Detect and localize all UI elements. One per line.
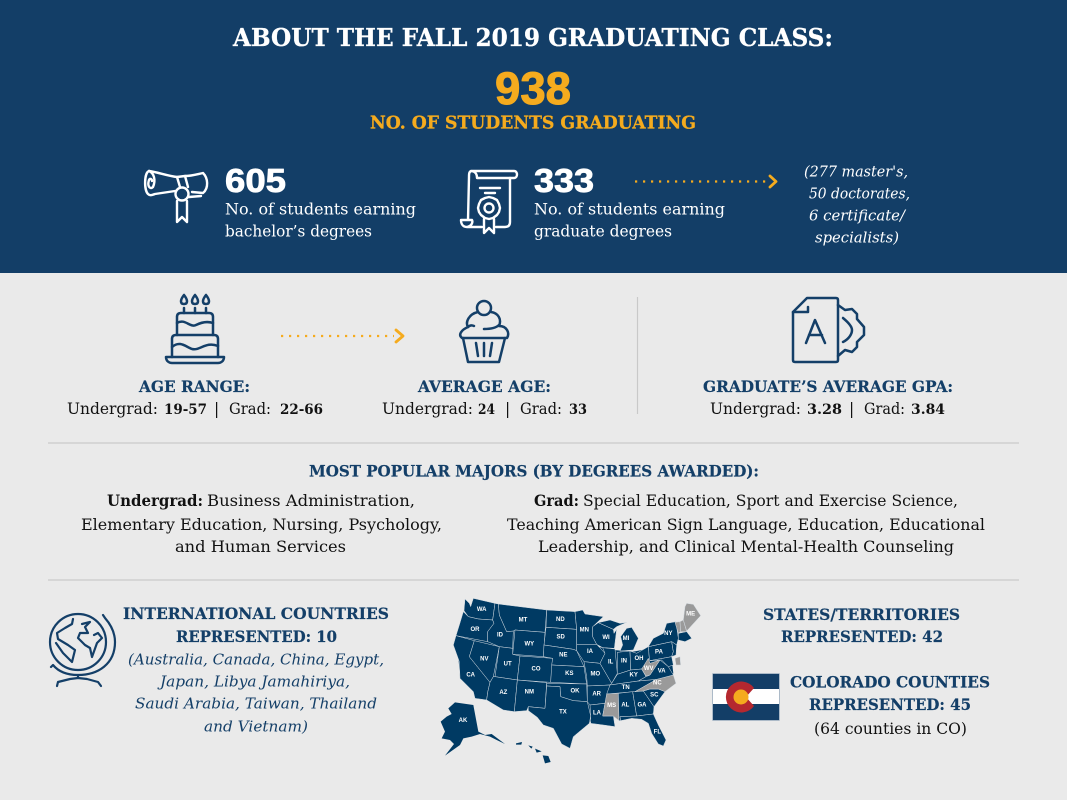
text block: Colorado counties: (64 counties in CO)	[814, 720, 967, 738]
map: US states represented: NE	[559, 652, 567, 658]
stat: bachelor's degrees: No. of students earning	[225, 200, 416, 218]
text block: undergrad majors: and Human Services	[175, 538, 346, 556]
stat: average age: 33	[569, 402, 587, 418]
map: US states represented: CA	[466, 673, 476, 679]
map: US states represented: CO	[532, 667, 541, 673]
map: US states represented: NC	[653, 681, 662, 687]
stat: graduate degrees	[534, 162, 725, 240]
text block: graduate majors: Special Education, Sport and Exercise Science,	[583, 492, 958, 510]
text block: international countries: Saudi Arabia, Taiwan, Thailand	[135, 694, 377, 712]
heading: most popular majors: MOST POPULAR MAJORS (BY DEGREES AWARDED):	[309, 462, 759, 480]
map: US states represented: SC	[650, 692, 659, 698]
text block: undergrad majors: Elementary Education, Nursing, Psychology,	[81, 516, 442, 534]
map: US states represented: WV	[644, 666, 653, 672]
map: US states represented: IL	[608, 660, 614, 666]
graduate degree breakdown: 6 certificate/	[809, 206, 907, 224]
map: US states represented: MI	[623, 636, 630, 642]
stat: bachelor's degrees: 605	[225, 162, 286, 199]
map: US states represented: TN	[622, 685, 630, 691]
text block: states and territories	[763, 605, 960, 646]
map: US states represented: MN	[580, 627, 589, 633]
stat: graduate's average GPA: GRADUATE’S AVERAGE GPA:	[703, 377, 953, 396]
stat: age range: AGE RANGE:	[138, 377, 250, 396]
stat: age range: 22-66	[280, 402, 323, 418]
stat: graduate's average GPA: |	[849, 400, 854, 418]
text block: undergrad majors: Undergrad:	[107, 491, 203, 510]
stat: age range: Grad:	[229, 400, 271, 418]
icon: birthday cake	[166, 295, 224, 363]
map: US states represented: IN	[621, 659, 627, 665]
total students number: 938	[495, 63, 571, 114]
stat: graduate's average GPA: 3.84	[911, 402, 945, 418]
text block: international countries: INTERNATIONAL COUNTRIES	[123, 604, 389, 623]
icon: globe	[50, 614, 115, 686]
map: US states represented: GA	[638, 702, 647, 708]
text block: Colorado counties: COLORADO COUNTIES	[790, 672, 990, 692]
stat: average age: Undergrad:	[382, 400, 473, 418]
text block: undergrad majors: Business Administration,	[207, 492, 415, 510]
map: US states represented: WI	[602, 635, 610, 641]
stat: average age: Grad:	[520, 400, 562, 418]
stat: graduate degrees: graduate degrees	[534, 222, 672, 240]
stat: age range: |	[214, 400, 219, 418]
map: US states represented: FL	[654, 729, 661, 735]
icon: cupcake	[460, 301, 508, 362]
map: US states represented: MS	[607, 703, 616, 709]
text block: graduate majors: Grad:	[534, 491, 579, 510]
text block: international countries: REPRESENTED: 10	[176, 627, 337, 646]
text block: graduate majors: Teaching American Sign Language, Education, Educational	[507, 516, 985, 534]
map: US states represented: ID	[497, 633, 504, 639]
map: US states represented: WY	[525, 641, 534, 647]
text block: Colorado counties: REPRESENTED: 45	[809, 695, 971, 714]
text block: graduate majors	[507, 491, 985, 556]
stat: average age: |	[505, 400, 510, 418]
map: US states represented: OK	[571, 688, 580, 694]
map: US states represented: VA	[658, 668, 666, 674]
stat: graduate's average GPA: 3.28	[807, 402, 842, 418]
graduate degree breakdown	[804, 162, 910, 246]
map: US states represented: IA	[587, 649, 594, 655]
map: US states represented: WA	[477, 607, 487, 613]
map: US states represented: KS	[565, 671, 573, 677]
graduate degree breakdown: 50 doctorates,	[809, 184, 910, 202]
graduate degree breakdown: (277 master's,	[804, 162, 908, 180]
map: US states represented: KY	[630, 672, 638, 678]
map: US states represented: TX	[559, 709, 567, 715]
stat: bachelor's degrees: bachelor’s degrees	[225, 222, 372, 240]
text block: Colorado counties	[790, 672, 990, 738]
total students label: NO. OF STUDENTS GRADUATING	[370, 112, 696, 134]
title: ABOUT THE FALL 2019 GRADUATING CLASS:	[232, 23, 833, 52]
stat: average age: 24	[478, 402, 495, 418]
text block: international countries	[123, 604, 389, 736]
arrow: graduate breakdown	[635, 176, 776, 187]
map: US states represented: MT	[519, 617, 528, 623]
map: US states represented	[441, 598, 701, 763]
stat: age range: 19-57	[164, 402, 207, 418]
stat: graduate degrees: No. of students earning	[534, 200, 725, 218]
text block: graduate majors: Leadership, and Clinical Mental-Health Counseling	[538, 538, 954, 556]
map: US states represented: AK	[459, 718, 468, 724]
panel: header summary	[0, 0, 1067, 273]
text block: international countries: and Vietnam)	[204, 718, 308, 736]
stat: bachelor's degrees	[225, 162, 416, 240]
map: US states represented: NY	[664, 631, 672, 637]
graduate degree breakdown: specialists)	[815, 228, 899, 246]
map: US states represented: LA	[593, 710, 602, 716]
stat: graduate's average GPA: Undergrad:	[710, 400, 801, 418]
map: US states represented: PA	[655, 649, 664, 655]
arrow: age range to average age	[281, 330, 403, 342]
map: US states represented: MO	[591, 672, 600, 678]
map: US states represented: ME	[686, 611, 695, 617]
stat: graduate's average GPA: Grad:	[864, 400, 905, 418]
map: US states represented: ND	[556, 617, 565, 623]
map: US states represented: UT	[504, 661, 512, 667]
text block: states and territories: STATES/TERRITORIES	[763, 605, 960, 624]
map: US states represented: NM	[525, 690, 534, 696]
stat: average age: AVERAGE AGE:	[417, 377, 551, 396]
stat: average age	[382, 377, 587, 418]
text block: undergrad majors	[81, 491, 442, 556]
text block: international countries: Japan, Libya Jamahiriya,	[157, 672, 350, 690]
icon: diploma scroll	[145, 171, 207, 222]
icon: graded document with gear	[793, 298, 864, 362]
icon: Colorado flag	[712, 674, 780, 720]
map: US states represented: OH	[635, 656, 643, 662]
map: US states represented: AL	[621, 703, 630, 709]
map: US states represented: AZ	[499, 690, 508, 696]
stat: age range	[67, 377, 323, 418]
stat: graduate degrees: 333	[534, 162, 594, 199]
map: US states represented: AR	[592, 691, 602, 697]
map: US states represented: NV	[480, 656, 488, 662]
icon: certificate scroll	[461, 171, 517, 233]
map: US states represented: OR	[471, 627, 480, 633]
text block: international countries: (Australia, Canada, China, Egypt,	[128, 650, 384, 668]
stat: graduate's average GPA	[703, 377, 953, 418]
map: US states represented: SD	[557, 635, 565, 641]
text block: states and territories: REPRESENTED: 42	[781, 627, 943, 646]
stat: age range: Undergrad:	[67, 400, 158, 418]
